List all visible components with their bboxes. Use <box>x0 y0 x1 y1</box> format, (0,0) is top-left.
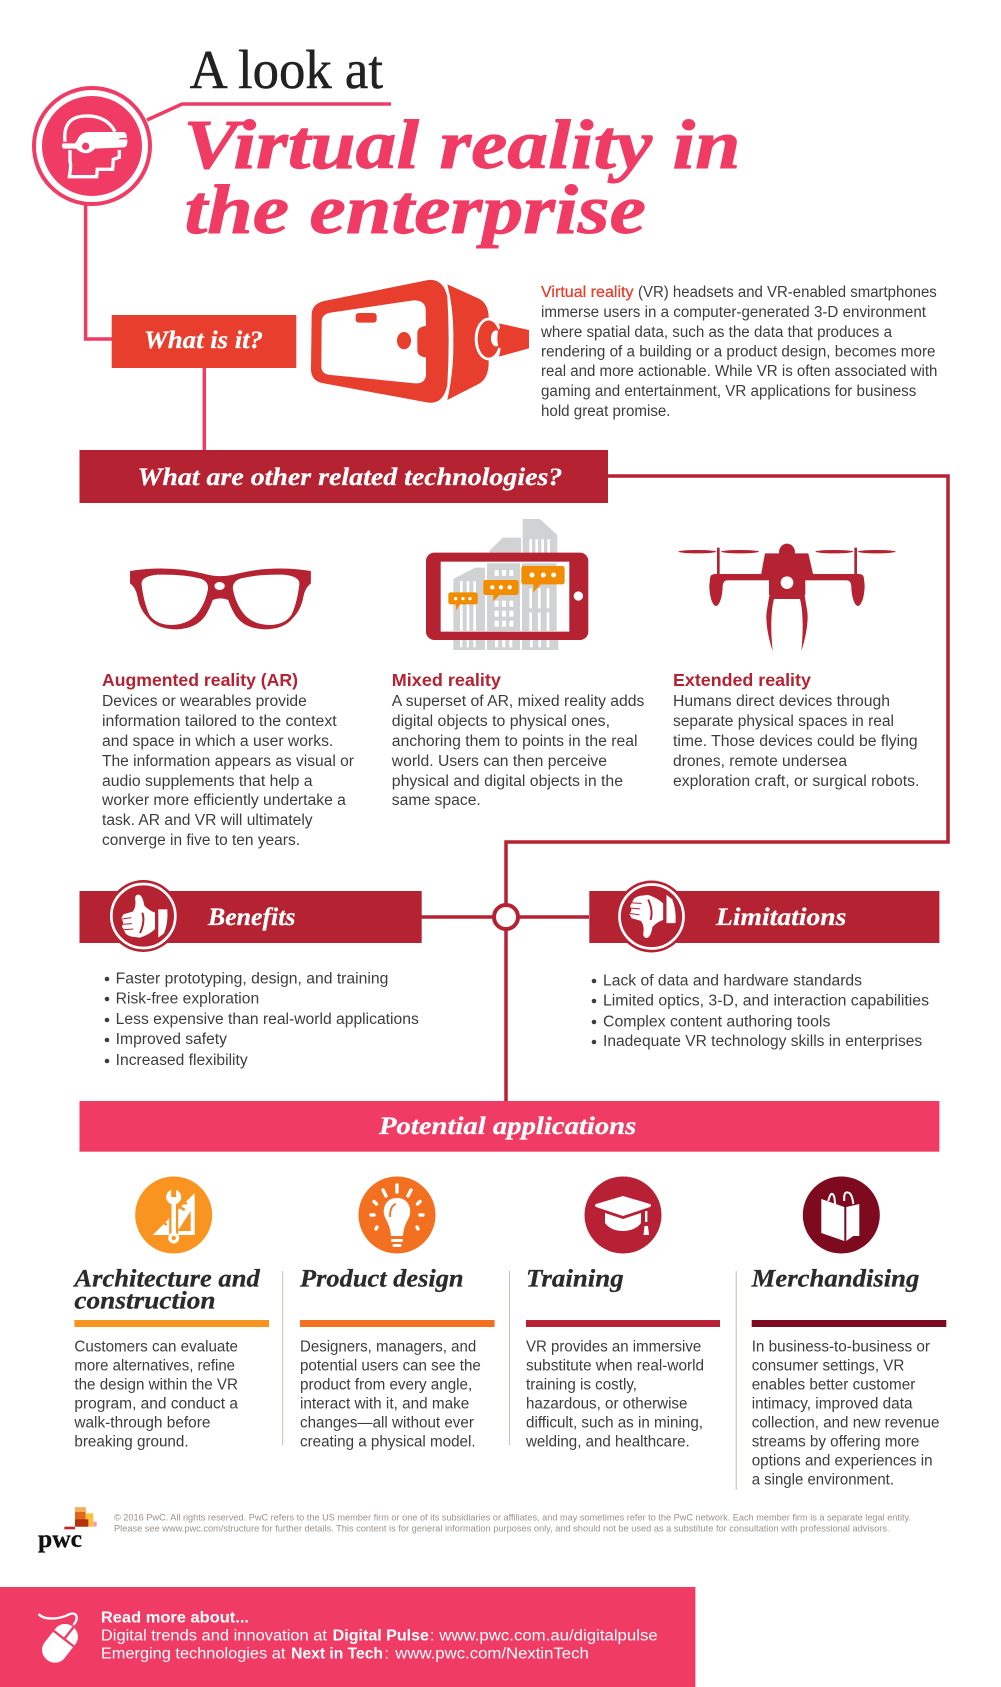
icon: mixed reality tablet <box>426 519 588 650</box>
text: read more links <box>101 1610 658 1663</box>
text block: copyright <box>114 1513 911 1534</box>
heading: augmented reality: Augmented reality (AR) <box>102 670 298 690</box>
icon: AR glasses <box>130 569 311 629</box>
text block: benefits list: Improved safety <box>116 1031 227 1048</box>
heading: potential applications: Potential applications <box>378 1113 636 1140</box>
text block: copyright: Please see www.pwc.com/structure for further details. This content is for general information purposes only, and should not be used as a substitute for consultation with professional advisors. <box>114 1524 889 1534</box>
application: merchandising <box>751 1266 946 1489</box>
title: A look at: A look at <box>190 39 383 100</box>
heading: architecture and construction: Architecture and <box>72 1266 260 1293</box>
icon: architecture wrench and ruler <box>135 1176 212 1254</box>
text block: extended reality: Humans direct devices through <box>673 693 890 710</box>
heading: architecture and construction <box>72 1266 260 1314</box>
application: training: difficult, such as in mining, <box>526 1415 703 1432</box>
application: merchandising: enables better customer <box>752 1377 915 1394</box>
heading: merchandising: Merchandising <box>751 1266 919 1293</box>
connector lines: technologies and benefits <box>421 476 948 1101</box>
application: training: VR provides an immersive <box>526 1339 701 1356</box>
application: architecture and construction: more alternatives, refine <box>74 1358 235 1375</box>
panel: related technologies banner <box>80 450 608 503</box>
application: product design: creating a physical model. <box>300 1434 476 1451</box>
application: product design <box>299 1266 495 1451</box>
text: read more links: Next in Tech <box>291 1646 383 1663</box>
heading: product design: Product design <box>299 1266 464 1293</box>
icon: product design lightbulb <box>358 1176 436 1254</box>
text block: mixed reality: A superset of AR, mixed reality adds <box>392 693 645 710</box>
application: product design: product from every angle, <box>300 1377 472 1394</box>
heading: limitations: Limitations <box>715 904 846 931</box>
text block: limitations list: Limited optics, 3-D, and interaction capabilities <box>603 992 929 1009</box>
application: product design: Designers, managers, and <box>300 1339 476 1356</box>
application: training: welding, and healthcare. <box>525 1434 690 1451</box>
icon: thumbs down <box>616 881 687 952</box>
text block: virtual reality definition: real and more actionable. While VR is often associated with <box>541 363 937 380</box>
text: read more links: Digital trends and innovation at <box>101 1628 328 1645</box>
text block: virtual reality definition <box>540 284 937 420</box>
application: merchandising: intimacy, improved data <box>752 1396 913 1413</box>
text block: benefits list: Less expensive than real-world applications <box>116 1011 419 1028</box>
application: merchandising: a single environment. <box>752 1472 894 1489</box>
application: training <box>525 1266 720 1451</box>
panel: limitations banner <box>589 881 939 952</box>
text block: virtual reality definition: (VR) headsets and VR-enabled smartphones <box>638 284 937 301</box>
text block: benefits list: Faster prototyping, design, and training <box>116 970 388 987</box>
heading: training: Training <box>526 1266 624 1293</box>
text block: limitations list: Complex content authoring tools <box>603 1013 831 1030</box>
icon: training graduation cap <box>584 1176 662 1254</box>
panel: what is it <box>112 315 296 368</box>
application: architecture and construction: the design within the VR <box>74 1377 238 1394</box>
text block: mixed reality: anchoring them to points in the real <box>392 733 638 750</box>
text block: mixed reality <box>391 670 645 809</box>
text block: virtual reality definition: gaming and entertainment, VR applications for business <box>541 383 917 400</box>
connector lines: header <box>86 104 391 450</box>
icon: drone <box>678 544 896 651</box>
text block: limitations list: Lack of data and hardware standards <box>603 972 862 989</box>
application: architecture and construction: program, and conduct a <box>74 1396 238 1413</box>
application: training: substitute when real-world <box>526 1358 704 1375</box>
icon: computer mouse <box>37 1614 83 1668</box>
application: training: hazardous, or otherwise <box>526 1396 687 1413</box>
text block: augmented reality: task. AR and VR will ultimately <box>102 812 313 829</box>
application: architecture and construction: Customers can evaluate <box>74 1339 238 1356</box>
icon: VR headset <box>311 280 529 403</box>
text block: benefits list: Risk-free exploration <box>116 990 259 1007</box>
heading: mixed reality: Mixed reality <box>392 670 501 690</box>
logo: pwc: pwc <box>38 1526 82 1553</box>
application: merchandising: In business-to-business or <box>752 1339 930 1356</box>
text: read more links: Read more about... <box>101 1610 249 1627</box>
text block: mixed reality: same space. <box>392 792 481 809</box>
application: product design: interact with it, and make <box>300 1396 469 1413</box>
title: Virtual reality in the enterprise: the enterprise <box>184 172 646 249</box>
connector node <box>494 905 518 929</box>
title: Virtual reality in the enterprise <box>184 107 740 249</box>
application: architecture and construction <box>72 1266 269 1451</box>
text block: augmented reality: Devices or wearables provide <box>102 693 307 710</box>
application: architecture and construction: walk-through before <box>73 1415 210 1432</box>
text: read more links: Emerging technologies at <box>101 1646 286 1663</box>
application: merchandising: streams by offering more <box>752 1434 919 1451</box>
panel: potential applications banner <box>80 1101 939 1152</box>
application: product design: changes—all without ever <box>300 1415 474 1432</box>
text: read more links: : <box>384 1646 389 1663</box>
icon: thumbs up <box>107 880 179 952</box>
text block: extended reality: drones, remote undersea <box>673 753 847 770</box>
text block: copyright: © 2016 PwC. All rights reserved. PwC refers to the US member firm or one of its subsidiaries or affiliates, and may sometimes refer to the PwC network. Each member firm is a separate legal entity. <box>114 1513 911 1523</box>
text block: extended reality <box>673 670 919 790</box>
text block: virtual reality definition: where spatial data, such as the data that produces a <box>540 324 892 341</box>
application: merchandising: consumer settings, VR <box>752 1358 904 1375</box>
text block: benefits list: Increased flexibility <box>116 1052 248 1069</box>
panel: benefits banner <box>80 880 422 952</box>
text block: virtual reality definition: immerse users in a computer-generated 3-D environment <box>541 304 927 321</box>
text block: mixed reality: world. Users can then perceive <box>391 753 607 770</box>
text block: augmented reality: converge in five to ten years. <box>102 832 300 849</box>
heading: architecture and construction: construction <box>74 1287 216 1314</box>
text block: augmented reality <box>101 670 354 849</box>
application: merchandising: options and experiences in <box>752 1453 933 1470</box>
text: read more links: : <box>430 1628 434 1645</box>
icon: merchandising book bag <box>803 1176 880 1254</box>
heading: benefits: Benefits <box>207 904 295 931</box>
text block: extended reality: separate physical spaces in real <box>673 713 894 730</box>
text block: virtual reality definition: hold great promise. <box>541 403 670 420</box>
text block: augmented reality: The information appears as visual or <box>102 753 354 770</box>
text block: extended reality: time. Those devices could be flying <box>673 733 918 750</box>
text: read more links: Digital Pulse <box>333 1628 429 1645</box>
application: training: training is costly, <box>526 1377 637 1394</box>
text block: mixed reality: physical and digital objects in the <box>392 773 623 790</box>
application: merchandising: collection, and new revenue <box>752 1415 939 1432</box>
text: read more links: www.pwc.com/NextinTech <box>394 1646 589 1663</box>
text block: limitations list: Inadequate VR technology skills in enterprises <box>603 1033 922 1050</box>
application: product design: potential users can see the <box>300 1358 481 1375</box>
text block: augmented reality: and space in which a user works. <box>102 733 333 750</box>
heading: extended reality: Extended reality <box>673 670 811 690</box>
column dividers <box>283 1271 736 1490</box>
heading: what is it: What is it? <box>144 327 263 354</box>
text block: virtual reality definition: rendering of a building or a product design, becomes more <box>541 344 936 360</box>
text: read more links: www.pwc.com.au/digitalpulse <box>438 1628 658 1645</box>
panel: read more footer <box>0 1587 695 1687</box>
application: architecture and construction: breaking ground. <box>74 1434 189 1451</box>
text block: augmented reality: audio supplements that help a <box>102 773 313 790</box>
text block: extended reality: exploration craft, or surgical robots. <box>673 773 919 790</box>
heading: related technologies: What are other related technologies? <box>138 464 562 491</box>
title: Virtual reality in the enterprise: Virtual reality in <box>184 107 740 184</box>
text block: augmented reality: information tailored to the context <box>102 713 337 730</box>
logo: pwc <box>38 1507 97 1553</box>
icon: speech bubbles <box>448 566 565 610</box>
text block: mixed reality: digital objects to physical ones, <box>392 713 610 730</box>
text block: limitations list <box>592 972 929 1050</box>
icon: VR head badge <box>34 88 150 204</box>
text block: virtual reality definition: Virtual reality <box>541 284 634 301</box>
text block: augmented reality: worker more efficiently undertake a <box>101 792 346 809</box>
text block: benefits list <box>105 970 419 1069</box>
